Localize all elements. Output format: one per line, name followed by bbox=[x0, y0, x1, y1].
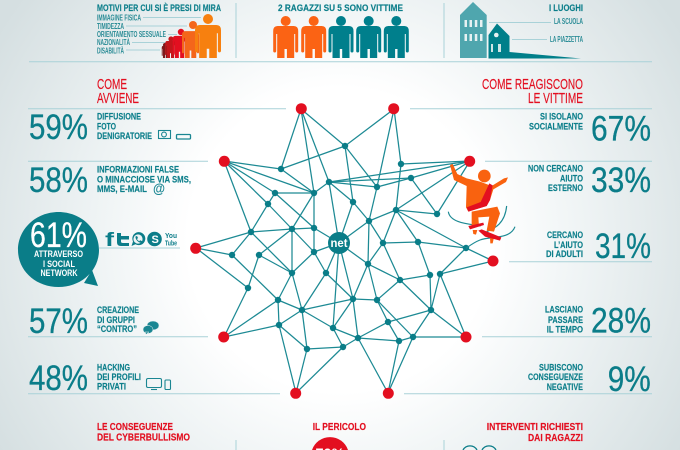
stat: 59%: 59% bbox=[29, 108, 88, 147]
stat: 48%: HACKING bbox=[97, 363, 130, 374]
heading: consequences: LE CONSEGUENZE bbox=[97, 421, 173, 433]
stat: 58% bbox=[29, 161, 191, 200]
illustration: skateboarder bbox=[448, 164, 515, 248]
red nodes bbox=[190, 103, 498, 399]
panel: requested interventions: DAI RAGAZZI bbox=[528, 432, 583, 444]
stat: 57%: “CONTRO” bbox=[97, 324, 137, 335]
heading: interventions: INTERVENTI RICHIESTI bbox=[487, 421, 583, 433]
stat: 58%: MMS, E-MAIL bbox=[97, 184, 147, 195]
stat: 28%: PASSARE bbox=[548, 315, 583, 326]
heading: danger: IL PERICOLO bbox=[313, 421, 366, 433]
callout: 61% social network: ATTRAVERSO bbox=[34, 249, 83, 260]
place labels: LA SCUOLA bbox=[554, 17, 583, 26]
icons: social networks: You bbox=[165, 233, 177, 240]
heading: come reagiscono: COME REAGISCONO bbox=[482, 77, 583, 93]
stat: 57% bbox=[29, 302, 159, 341]
callout: 61% social network: NETWORK bbox=[40, 268, 78, 279]
stat: 67%: SI ISOLANO bbox=[540, 112, 583, 122]
heading: come avviene bbox=[97, 77, 139, 107]
stat: 67%: 67% bbox=[591, 110, 651, 148]
hub: net bbox=[328, 232, 350, 254]
stat: 67% bbox=[529, 110, 651, 148]
panel: victims ratio bbox=[273, 3, 409, 58]
heading: consequences: DEL CYBERBULLISMO bbox=[97, 432, 190, 444]
stat: 33% bbox=[528, 161, 651, 200]
icons: social networks: S bbox=[152, 234, 159, 246]
heading: motives: MOTIVI PER CUI SI È PRESI DI MIRA bbox=[97, 2, 221, 14]
icon: circles bbox=[463, 446, 496, 450]
panel: places bbox=[460, 2, 583, 58]
stat: 9% bbox=[528, 360, 651, 399]
icon: at sign: @ bbox=[153, 180, 165, 196]
stat: 28%: 28% bbox=[591, 302, 651, 341]
stat: 59% bbox=[29, 108, 190, 147]
heading: come reagiscono: LE VITTIME bbox=[528, 91, 583, 107]
stat: 58%: O MINACCIOSE VIA SMS, bbox=[97, 174, 191, 186]
stat: 31%: CERCANO bbox=[547, 230, 583, 241]
icon: school building bbox=[460, 2, 487, 58]
place labels bbox=[489, 17, 583, 44]
stat: 31%: DI ADULTI bbox=[546, 249, 583, 260]
icon: device bbox=[176, 134, 190, 139]
icon: square house bbox=[488, 24, 581, 58]
stat: 9%: NEGATIVE bbox=[547, 382, 583, 393]
stat: 31%: 31% bbox=[595, 227, 651, 266]
stat: 48%: DEI PROFILI bbox=[97, 372, 141, 383]
motive labels: IMMAGINE FISICA bbox=[97, 14, 141, 22]
icon: five figures bbox=[273, 16, 409, 58]
heading: victims ratio: 2 RAGAZZI SU 5 SONO VITTIME bbox=[278, 3, 404, 14]
panel: requested interventions bbox=[463, 421, 583, 450]
callout: 61% social network: 61% bbox=[30, 216, 87, 255]
heading: come avviene: COME bbox=[97, 77, 127, 93]
stat: 9%: CONSEGUENZE bbox=[528, 372, 583, 383]
stat: 48%: 48% bbox=[29, 359, 88, 398]
stat: 31% bbox=[546, 227, 651, 266]
stat: 58%: INFORMAZIONI FALSE bbox=[97, 164, 179, 176]
icons: social networks: f bbox=[105, 230, 115, 251]
stat: 33%: NON CERCANO bbox=[528, 164, 583, 175]
heading: come reagiscono bbox=[482, 77, 583, 107]
stat: 28%: LASCIANO bbox=[545, 305, 583, 316]
network diagram bbox=[190, 103, 498, 399]
panel: motives bbox=[97, 2, 221, 58]
heading: consequences bbox=[97, 421, 190, 444]
icons: social networks: Tube bbox=[165, 240, 177, 248]
stat: 48% bbox=[29, 359, 170, 398]
stat: 57%: 57% bbox=[29, 302, 88, 341]
stat: 9%: 9% bbox=[608, 360, 651, 399]
hub: net: net bbox=[330, 236, 348, 250]
stat: 33%: ESTERNO bbox=[548, 183, 583, 194]
stat: 57%: DI GRUPPI bbox=[97, 315, 135, 326]
stat: 28% bbox=[545, 302, 651, 341]
icon: monitor and phone bbox=[146, 378, 170, 390]
callout: 61% social network: I SOCIAL bbox=[43, 259, 75, 270]
motive labels: NAZIONALITÀ bbox=[97, 38, 130, 47]
stat: 59%: DIFFUSIONE bbox=[97, 112, 141, 122]
icon: camera bbox=[158, 130, 170, 138]
icons: social networks bbox=[105, 230, 177, 251]
stat: 31%: L’AIUTO bbox=[554, 240, 583, 251]
stat: 58%: 58% bbox=[29, 161, 88, 200]
heading: come avviene: AVVIENE bbox=[97, 91, 139, 107]
stat: 59%: FOTO bbox=[97, 122, 116, 132]
motive labels: TIMIDEZZA bbox=[97, 22, 124, 31]
motive labels: DISABILITÀ bbox=[97, 46, 124, 56]
stat: 9%: SUBISCONO bbox=[539, 363, 583, 374]
icon: chat bubbles bbox=[143, 321, 159, 334]
stat: 48%: PRIVATI bbox=[97, 382, 126, 393]
panel: danger bbox=[312, 421, 366, 450]
stat: 67%: SOCIALMENTE bbox=[529, 122, 583, 132]
heading: places: I LUOGHI bbox=[549, 3, 583, 14]
motive labels: ORIENTAMENTO SESSUALE bbox=[97, 30, 166, 39]
icon: row of figures bbox=[162, 14, 221, 58]
stat: 28%: IL TEMPO bbox=[547, 325, 583, 336]
teal nodes bbox=[229, 143, 469, 352]
stat: 33%: 33% bbox=[591, 161, 651, 200]
stat: 33%: AIUTO bbox=[560, 174, 583, 185]
stat: 57%: CREAZIONE bbox=[97, 305, 139, 316]
network links bbox=[196, 109, 493, 393]
stat: 59%: DENIGRATORIE bbox=[97, 131, 152, 142]
motive labels bbox=[97, 14, 201, 56]
place labels: LA PIAZZETTA bbox=[550, 35, 583, 44]
callout: 61% social network bbox=[18, 212, 99, 287]
